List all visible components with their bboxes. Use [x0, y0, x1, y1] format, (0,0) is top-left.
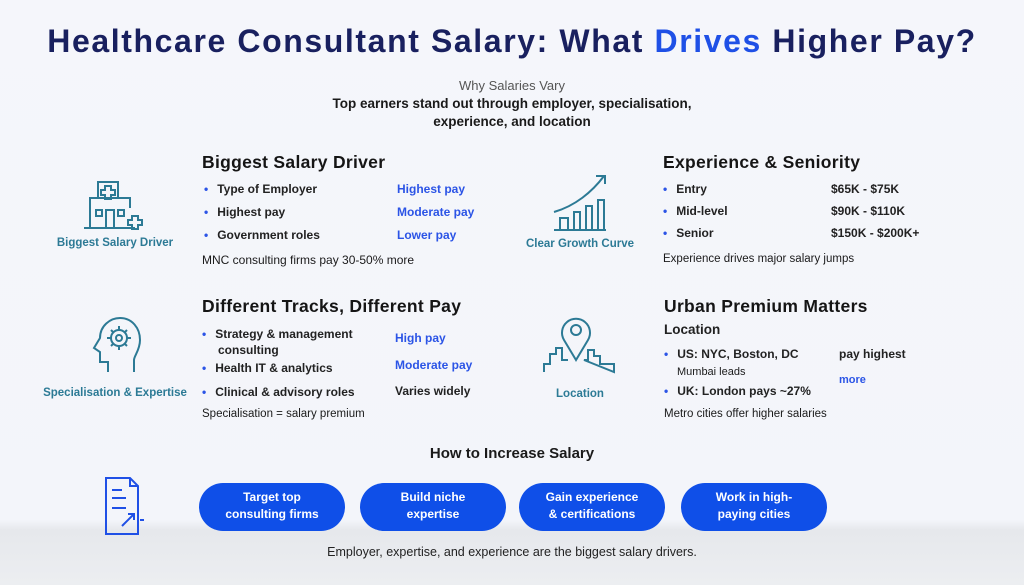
panel: different tracks: High pay: [395, 331, 446, 345]
panel: different tracks: consulting: [218, 343, 279, 357]
panel: different tracks: Specialisation = salary premium: [202, 408, 365, 420]
pill: niche expertise: [360, 483, 506, 531]
pill: niche expertise: Build niche: [401, 490, 465, 504]
panel: experience & seniority: • Senior: [663, 226, 714, 240]
pill: experience certifications: Gain experience: [546, 490, 638, 504]
panel: urban premium: Location: [664, 322, 720, 337]
panel: different tracks: [202, 296, 472, 420]
subtitle: [332, 78, 692, 129]
heading: how to increase salary: How to Increase Salary: [430, 445, 594, 462]
caption: Biggest Salary Driver: Biggest Salary Driver: [57, 237, 173, 249]
panel: different tracks: Varies widely: [395, 384, 470, 398]
icon: hospital: [84, 181, 143, 230]
subtitle: Why Salaries Vary: [459, 78, 565, 93]
panel: urban premium: Urban Premium Matters: [664, 296, 868, 316]
panel: experience & seniority: [663, 152, 919, 265]
panel: experience & seniority: $90K - $110K: [831, 204, 905, 218]
panel: urban premium: more: [839, 374, 866, 386]
panel: biggest salary driver: Lower pay: [397, 228, 456, 242]
panel: biggest salary driver: MNC consulting firms pay 30-50% more: [202, 253, 414, 267]
panel: biggest salary driver: • Type of Employer: [204, 182, 317, 196]
pill: niche expertise: expertise: [407, 507, 459, 521]
panel: urban premium: pay highest: [839, 347, 906, 361]
panel: biggest salary driver: Highest pay: [397, 182, 465, 196]
title: Healthcare Consultant Salary: What Drives Higher Pay?: [47, 23, 977, 59]
panel: experience & seniority: Experience drives major salary jumps: [663, 253, 854, 265]
panel: biggest salary driver: Biggest Salary Driver: [202, 152, 385, 172]
caption: Location: Location: [556, 388, 604, 400]
panel: experience & seniority: Experience & Seniority: [663, 152, 860, 172]
panel: urban premium: Mumbai leads: [677, 366, 745, 378]
pill: target top firms: Target top: [243, 490, 301, 504]
caption: Specialisation & Expertise: Specialisation & Expertise: [43, 387, 187, 399]
pill: target top firms: [199, 483, 345, 531]
panel: biggest salary driver: [202, 152, 474, 267]
subtitle: experience, and location: [433, 114, 591, 129]
pill: target top firms: consulting firms: [225, 507, 319, 521]
panel: different tracks: • Strategy & management: [202, 327, 353, 341]
pill: high-paying cities: Work in high-: [716, 490, 792, 504]
icon: location pin city: [543, 318, 615, 374]
panel: different tracks: Different Tracks, Different Pay: [202, 296, 461, 316]
panel: experience & seniority: • Entry: [663, 182, 707, 196]
pill: high-paying cities: paying cities: [718, 507, 790, 521]
icon: document arrow: [105, 477, 144, 535]
icon: head gear: [92, 317, 141, 372]
footer note: Employer, expertise, and experience are the biggest salary drivers.: [327, 545, 697, 559]
panel: experience & seniority: • Mid-level: [663, 204, 728, 218]
panel: urban premium: [664, 296, 906, 420]
caption: Clear Growth Curve: Clear Growth Curve: [526, 238, 634, 250]
panel: biggest salary driver: Moderate pay: [397, 205, 474, 219]
panel: urban premium: • US: NYC, Boston, DC: [664, 347, 799, 361]
subtitle: Top earners stand out through employer, specialisation,: [332, 96, 692, 111]
panel: experience & seniority: $65K - $75K: [831, 182, 899, 196]
panel: different tracks: Moderate pay: [395, 358, 472, 372]
panel: urban premium: Metro cities offer higher salaries: [664, 408, 827, 420]
panel: experience & seniority: $150K - $200K+: [831, 226, 919, 240]
icon: growth chart: [554, 175, 606, 231]
pill: experience certifications: [519, 483, 665, 531]
panel: different tracks: • Clinical & advisory roles: [202, 385, 355, 399]
panel: biggest salary driver: • Government roles: [204, 228, 320, 242]
panel: biggest salary driver: • Highest pay: [204, 205, 285, 219]
pill: high-paying cities: [681, 483, 827, 531]
pill: experience certifications: & certifications: [549, 507, 635, 521]
panel: urban premium: • UK: London pays ~27%: [664, 384, 811, 398]
panel: different tracks: • Health IT & analytics: [202, 361, 333, 375]
